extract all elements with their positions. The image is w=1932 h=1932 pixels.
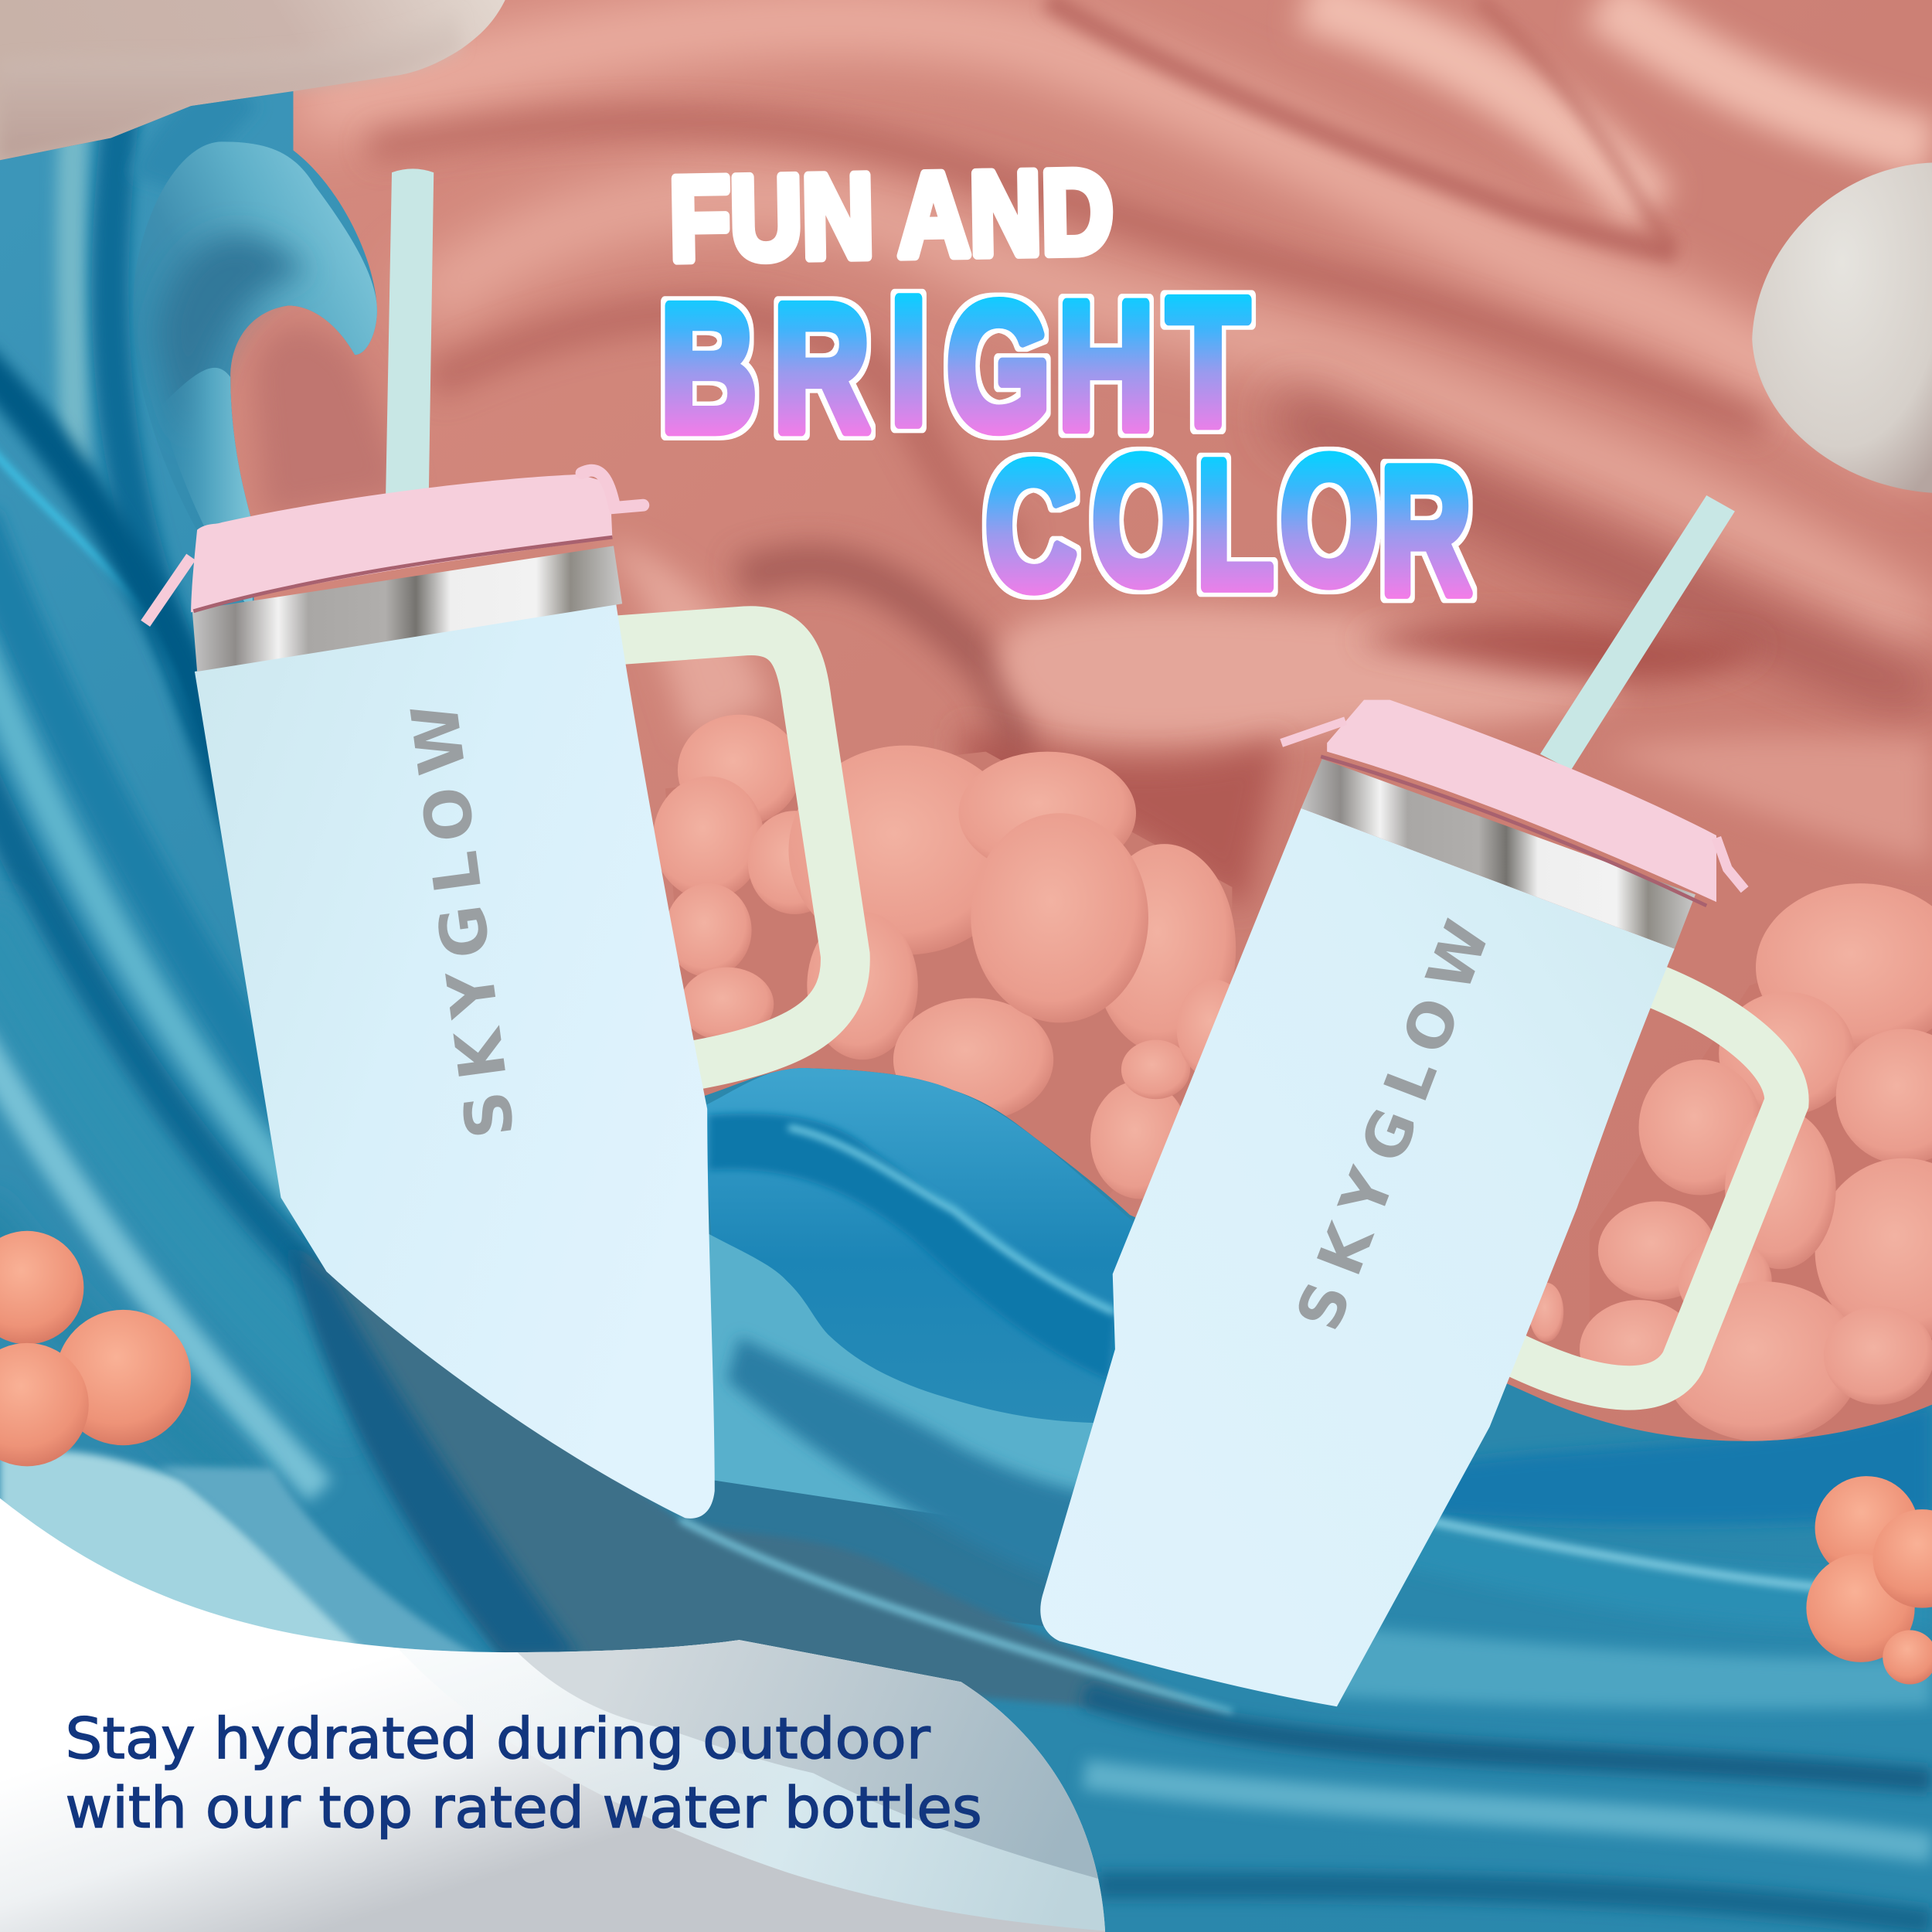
- tagline text: with our top rated water bottles: [66, 1775, 982, 1841]
- blue wave crest: [133, 141, 377, 616]
- tumbler: right: [1040, 495, 1787, 1706]
- title: BRIGHT: BRIGHT: [660, 259, 1249, 469]
- pink clouds behind the first tumbler: [653, 715, 1250, 1199]
- straw: [1540, 495, 1735, 770]
- pink lobes: [604, 543, 1932, 862]
- title: COLOR: COLOR: [985, 419, 1471, 632]
- logo: SKYGLOW: [1282, 911, 1504, 1340]
- wave: bottom left light fold: [0, 1447, 363, 1645]
- tumbler body: [195, 604, 715, 1519]
- bottom white panel: [0, 1478, 1121, 1932]
- tumbler body: [1040, 808, 1675, 1706]
- lid: [145, 471, 643, 624]
- orange clouds, bottom right: [1806, 1476, 1932, 1685]
- logo: SKYGLOW: [397, 699, 529, 1143]
- title: FUN AND: FUN AND: [668, 145, 1114, 285]
- decorative cloud, top left: [0, 0, 505, 160]
- decorative cream ball, right: [1752, 162, 1932, 493]
- lid: [1281, 700, 1745, 906]
- straw: [386, 168, 434, 499]
- pink clouds behind the second tumbler: [1529, 883, 1932, 1447]
- handle: [610, 631, 845, 1067]
- wave: middle ridge zone: [682, 1481, 1048, 1626]
- steel band: [192, 546, 622, 672]
- handle: [1503, 982, 1787, 1388]
- dark crevices: [961, 619, 1762, 912]
- steel band: [1301, 759, 1696, 949]
- tagline text: Stay hydrated during outdoor: [66, 1706, 931, 1772]
- tumbler: left: [145, 168, 845, 1519]
- wave: dark teal band: [302, 1250, 1232, 1719]
- wave: right lower ridges: [1417, 1405, 1932, 1525]
- tagline text: [66, 1706, 982, 1841]
- orange clouds, bottom left: [0, 1231, 191, 1466]
- shadow beneath crest: [253, 325, 406, 518]
